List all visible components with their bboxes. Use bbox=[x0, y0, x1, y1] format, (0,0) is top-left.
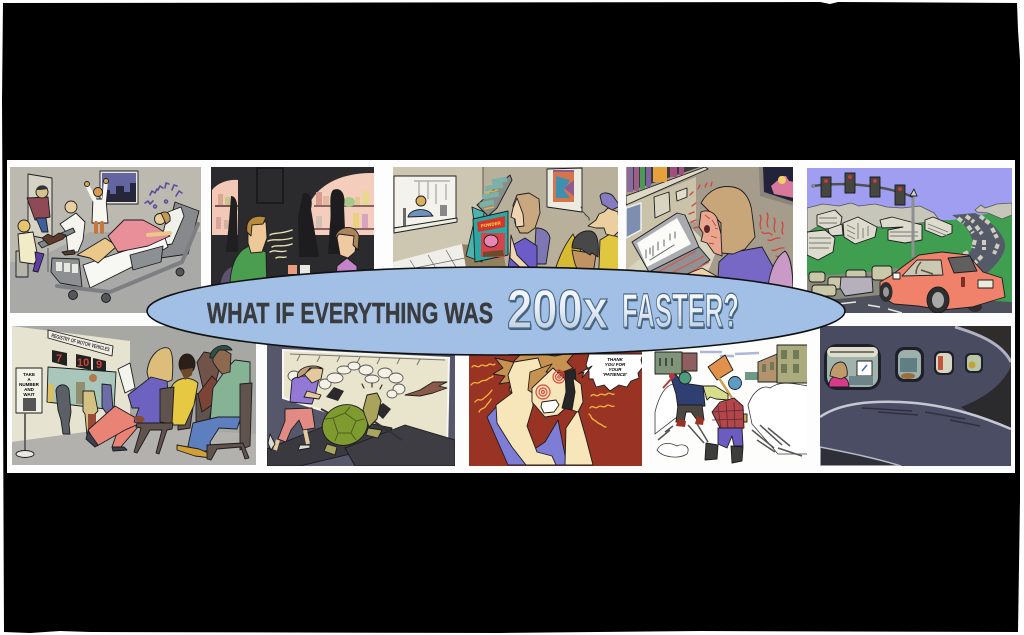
floor bbox=[10, 232, 201, 313]
green ground bbox=[807, 213, 1012, 313]
side monitor bbox=[626, 203, 641, 238]
orange car bbox=[880, 252, 1005, 313]
wall corner bbox=[482, 167, 484, 194]
wall stress marks bbox=[760, 213, 786, 257]
right arch with bottles and silhouettes bbox=[298, 173, 375, 257]
panel: angry woman on hold bbox=[469, 340, 643, 466]
engine stripe bbox=[820, 447, 901, 466]
blonde woman in purple jacket bbox=[86, 348, 173, 451]
emphasised title text: shadow: 200x bbox=[508, 280, 609, 342]
fuselage highlight bbox=[955, 327, 1011, 362]
shelf bbox=[626, 167, 708, 205]
panel: airplane bbox=[820, 326, 1012, 466]
teal magazine: POWDER bbox=[480, 220, 502, 229]
purple shirt bbox=[487, 405, 567, 465]
hospital bed bbox=[51, 202, 199, 302]
window frame lines bbox=[290, 354, 445, 365]
books bbox=[627, 167, 700, 192]
reception window bbox=[394, 176, 456, 228]
snow drifts bbox=[655, 383, 808, 457]
panel: hospital bed labour scene bbox=[10, 167, 201, 313]
person in red plaid jacket bbox=[703, 376, 744, 463]
hair back bbox=[493, 352, 575, 402]
seated blonde woman bbox=[16, 220, 44, 277]
woman bbox=[336, 227, 360, 271]
wing bbox=[820, 402, 1011, 466]
cubicle wall bbox=[626, 177, 696, 270]
buildings bbox=[655, 345, 808, 383]
emphasised title text: 200x bbox=[507, 278, 608, 340]
title ellipse banner bbox=[147, 267, 845, 355]
dark background below fuselage bbox=[961, 364, 1012, 432]
raised arm bbox=[496, 358, 556, 465]
desk surface bbox=[626, 222, 716, 292]
back brown chair bbox=[178, 386, 214, 432]
navy coat shoveler bbox=[663, 372, 705, 427]
floor bbox=[12, 426, 256, 465]
shadow scratches in snow bbox=[658, 422, 802, 456]
running hare bbox=[405, 382, 447, 396]
take a number sign on stand: TAKE bbox=[23, 372, 35, 377]
woman reading bbox=[508, 192, 540, 266]
sky clouds bbox=[700, 352, 759, 356]
bar wall panel bbox=[257, 168, 283, 203]
traffic signal arm and pole bbox=[811, 184, 917, 257]
magazine rack bbox=[477, 175, 512, 216]
emphasised title text: shadow: FASTER? bbox=[623, 287, 740, 340]
front brown chair bbox=[134, 387, 174, 454]
number counters: 9 bbox=[96, 359, 102, 371]
pinned notes bbox=[654, 188, 687, 218]
glasses eye and lines bbox=[704, 215, 718, 244]
dark background above fuselage bbox=[955, 326, 1012, 364]
face bbox=[699, 211, 722, 256]
purple shirt bbox=[717, 247, 780, 292]
framed picture bbox=[759, 167, 794, 206]
people at service window bbox=[56, 374, 113, 436]
emphasised title text: shadow bbox=[508, 280, 740, 342]
woman's hands bbox=[682, 268, 720, 292]
man in green shirt bbox=[230, 216, 268, 282]
yellow frustration squiggles bbox=[471, 364, 614, 427]
wing highlight bbox=[820, 402, 1011, 429]
gym window bbox=[283, 350, 449, 450]
chair behind hoodie man bbox=[207, 383, 252, 460]
road bbox=[807, 295, 1012, 313]
boy with head down bbox=[556, 230, 599, 268]
drinks on table bbox=[288, 265, 310, 274]
building windows bbox=[809, 218, 948, 248]
emphasised title text bbox=[507, 278, 739, 340]
yellow shirt of yelling man bbox=[598, 234, 618, 269]
spiral eyes bbox=[536, 371, 565, 399]
first airplane window with passenger bbox=[824, 344, 881, 390]
number counters: 7 bbox=[56, 353, 62, 365]
panel: traffic jam bbox=[807, 168, 1012, 313]
panel: waiting room reading magazine bbox=[393, 167, 618, 269]
window at night bbox=[100, 171, 138, 204]
purple chair bbox=[220, 267, 232, 284]
treadmills bbox=[267, 387, 455, 466]
registry sign: REGISTRY OF MOTOR VEHICLES bbox=[51, 333, 110, 354]
wall poster bbox=[547, 168, 582, 212]
pink chair bbox=[768, 251, 793, 292]
panel: dark bar date bbox=[211, 167, 375, 292]
doorway bbox=[28, 174, 52, 240]
take a number sign on stand: A bbox=[27, 377, 31, 382]
registry sign bbox=[48, 330, 113, 356]
checkered floor bbox=[393, 244, 466, 268]
panel: motor vehicles registry waiting room bbox=[12, 326, 256, 465]
second window bbox=[895, 347, 924, 382]
take a number sign on stand: WAIT bbox=[23, 392, 35, 397]
left wall bbox=[393, 167, 483, 262]
traffic on lower left bbox=[807, 268, 898, 300]
tortoise bbox=[317, 393, 382, 455]
panel: stressed woman at laptop bbox=[626, 167, 794, 292]
back skyline bbox=[807, 203, 1012, 233]
purple chair bbox=[534, 228, 550, 264]
clenched teeth bbox=[541, 400, 559, 413]
title text: WHAT IF EVERYTHING WAS bbox=[207, 298, 493, 330]
seated doctor bbox=[60, 201, 85, 255]
number counters: 10 bbox=[77, 357, 89, 369]
third window bbox=[934, 351, 954, 375]
stress marks over tortoise bbox=[362, 383, 382, 389]
smoke trail bbox=[288, 362, 405, 398]
laptop bbox=[632, 213, 710, 292]
cream wall bbox=[12, 326, 130, 442]
take a number sign on stand: AND bbox=[24, 387, 35, 392]
number counters bbox=[52, 350, 106, 372]
speech bubble: YOU FOR bbox=[605, 362, 626, 367]
phone bbox=[562, 369, 577, 410]
face bbox=[532, 368, 572, 417]
left arch with bottles bbox=[212, 180, 238, 252]
moan squiggles bbox=[145, 183, 182, 208]
brown floor bbox=[462, 244, 506, 266]
take a number sign on stand bbox=[16, 368, 42, 458]
speech bubble: 'PATIENCE' bbox=[603, 372, 628, 377]
doctor cheering in white coat bbox=[84, 178, 108, 232]
man in green hoodie bbox=[177, 345, 250, 458]
hand on phone bbox=[572, 378, 583, 412]
red stress marks bbox=[689, 182, 712, 228]
panel: treadmill tortoise and hare bbox=[267, 326, 455, 466]
emphasised title text: FASTER? bbox=[622, 285, 739, 338]
jogging woman bbox=[268, 366, 323, 450]
white comic strip band bbox=[7, 160, 1015, 473]
fourth window bbox=[965, 353, 983, 373]
teal magazine bbox=[466, 207, 508, 262]
complaint marks bbox=[581, 207, 589, 220]
front hair locks bbox=[528, 364, 554, 394]
standing man in maroon shirt bbox=[27, 185, 50, 232]
table with food bbox=[38, 228, 75, 272]
orange shovel bbox=[708, 355, 747, 422]
counter bbox=[394, 218, 457, 233]
speech bubble: YOUR bbox=[608, 367, 622, 372]
small seated crowd bbox=[197, 352, 221, 412]
speech bubble bbox=[578, 354, 643, 391]
seated man in yellow shirt bbox=[170, 354, 198, 425]
take a number sign on stand: NUMBER bbox=[19, 382, 40, 387]
patient bbox=[77, 212, 170, 263]
chatter squiggles bbox=[268, 230, 292, 258]
city buildings bbox=[807, 210, 952, 260]
hair bbox=[701, 187, 755, 254]
camper van bbox=[840, 277, 873, 296]
wing shading bbox=[862, 408, 980, 426]
panel: shoveling snow bbox=[654, 335, 808, 466]
yelling man with cap bbox=[588, 193, 620, 236]
congested highway bbox=[950, 213, 1005, 275]
lilac chair bbox=[356, 275, 374, 292]
service window bbox=[47, 367, 116, 410]
speech bubble: THANK bbox=[607, 357, 624, 362]
traffic lights bbox=[821, 173, 905, 205]
right arm bbox=[565, 410, 593, 465]
